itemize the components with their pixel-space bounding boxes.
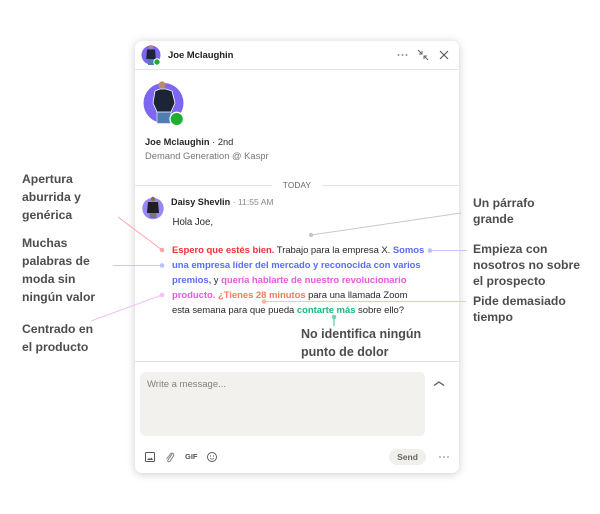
sender avatar: Daisy Shevlin xyxy=(142,196,164,220)
callout: large paragraph xyxy=(473,196,535,226)
callout: boring opening xyxy=(22,172,81,222)
icon: image xyxy=(145,452,155,462)
send button xyxy=(389,449,426,465)
header avatar: Joe Mclaughlin xyxy=(142,45,160,65)
profile avatar: Joe Mclaughlin xyxy=(144,81,184,125)
callout: product centred: Centrado en xyxy=(22,322,93,336)
icon: emoji xyxy=(207,452,217,462)
date divider: TODAY xyxy=(283,181,311,190)
callout: no pain point: punto de dolor xyxy=(301,345,388,359)
callout: buzzwords: moda sin xyxy=(22,272,76,286)
message body: Espero que estés bien. Trabajo para la empresa X. Somos xyxy=(172,245,424,256)
callout: starts with us xyxy=(473,242,580,288)
callout: no pain point: No identifica ningún xyxy=(301,327,421,341)
callout: product centred xyxy=(22,322,93,354)
message body: producto. ¿Tienes 28 minutos para una llamada Zoom xyxy=(172,290,407,300)
icon: close xyxy=(440,50,448,60)
header divider xyxy=(135,69,459,70)
callout: no pain point xyxy=(301,327,421,359)
icon: more options xyxy=(398,54,408,56)
sender and time: Daisy Shevlin · 11:55 AM xyxy=(171,197,274,207)
callout: boring opening: genérica xyxy=(22,208,72,222)
callout: large paragraph: grande xyxy=(473,212,514,226)
header name: Joe Mclaughin xyxy=(168,50,233,61)
icon: GIF: GIF xyxy=(185,452,198,461)
icon: attachment xyxy=(166,452,174,462)
icon: minimise xyxy=(418,50,428,60)
callout: asks too much time: tiempo xyxy=(473,310,513,324)
send button: Send xyxy=(397,452,418,462)
panel: messaging window xyxy=(135,41,459,473)
callout: boring opening: Apertura xyxy=(22,172,73,186)
callout: starts with us: el prospecto xyxy=(473,274,545,288)
message body: esta semana para que pueda contarte más sobre ello? xyxy=(172,304,404,316)
callout: buzzwords: palabras de xyxy=(22,254,90,268)
callout: buzzwords: Muchas xyxy=(22,236,67,250)
callout: starts with us: Empieza con xyxy=(473,242,548,256)
callout: large paragraph: Un párrafo xyxy=(473,196,535,210)
message body xyxy=(172,245,424,316)
message body: premios, y quería hablarte de nuestro revolucionario xyxy=(172,275,406,286)
icon: composer options xyxy=(439,456,449,458)
profile title: Demand Generation @ Kaspr xyxy=(145,150,269,160)
input placeholder: Write a message... xyxy=(147,378,226,390)
callout: asks too much time xyxy=(473,294,566,324)
message input xyxy=(140,372,425,436)
callout: boring opening: aburrida y xyxy=(22,190,81,204)
profile name: Joe Mclaughin · 2nd xyxy=(145,137,233,147)
composer divider xyxy=(135,361,459,362)
icon: expand chevron xyxy=(434,381,444,386)
callout: buzzwords xyxy=(22,236,95,304)
message body: una empresa líder del mercado y reconocida con varios xyxy=(172,260,421,271)
callout: product centred: el producto xyxy=(22,340,88,354)
callout: buzzwords: ningún valor xyxy=(22,290,95,304)
callout: asks too much time: Pide demasiado xyxy=(473,294,566,308)
callout: starts with us: nosotros no sobre xyxy=(473,258,580,272)
message greeting: Hola Joe, xyxy=(172,217,213,228)
